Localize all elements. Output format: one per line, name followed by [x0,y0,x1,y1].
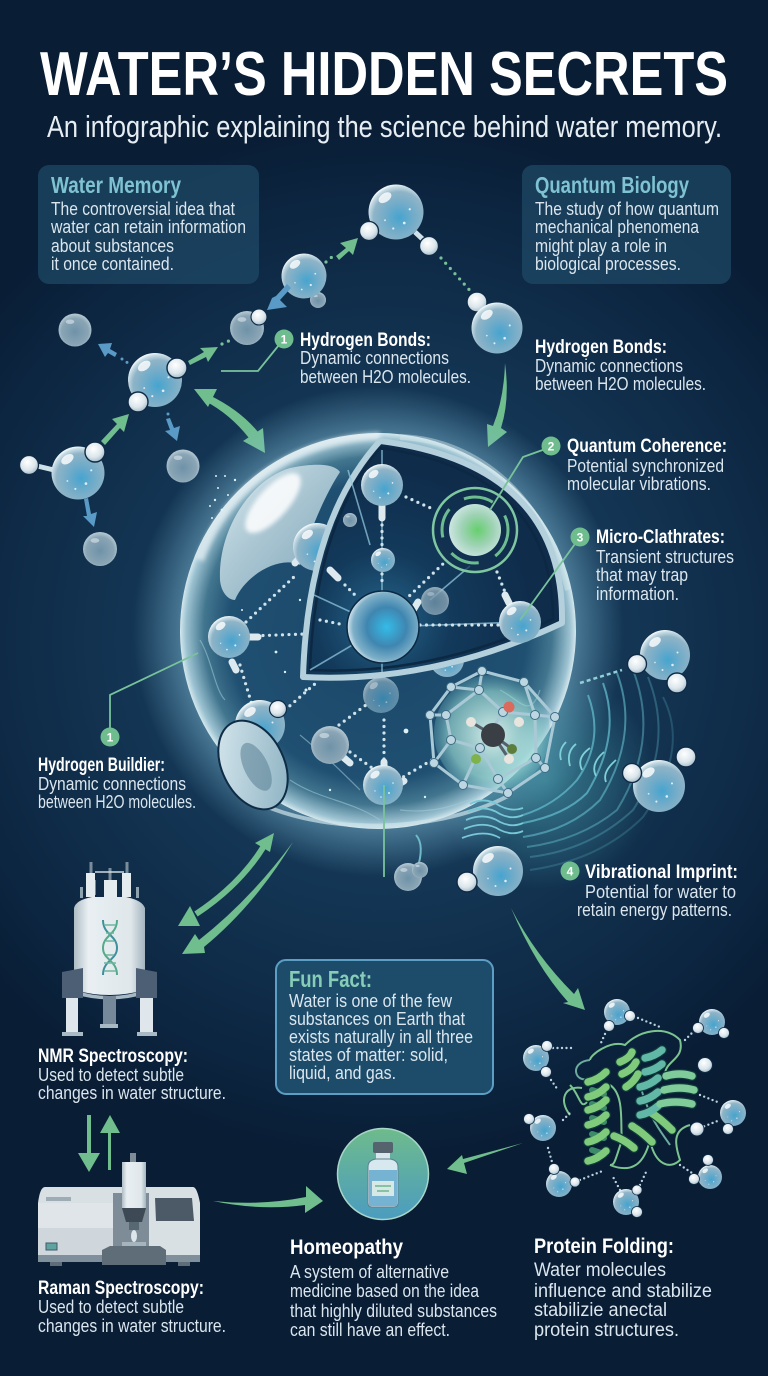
arrow: protein to homeopathy [447,1143,523,1174]
label: homeopathy: can still have an effect. [290,1320,450,1340]
label: hydrogen bonds right: Dynamic connections [535,356,683,376]
label: Raman spectroscopy: Raman Spectroscopy: [38,1278,204,1299]
panel: fun fact [276,960,493,1094]
arrows: NMR and Raman exchange [78,1115,120,1172]
label: micro-clathrates: 3 [577,530,584,544]
label: hydrogen bonds 1: between H2O molecules. [300,367,471,387]
label: homeopathy: A system of alternative [290,1262,449,1282]
label: homeopathy: that highly diluted substances [290,1301,497,1321]
text: quantum biology definition: might play a role in [535,236,667,256]
label: hydrogen buildier: Hydrogen Buildier: [38,755,165,776]
label: hydrogen bonds right: Hydrogen Bonds: [535,337,667,358]
text: water memory definition [50,199,246,274]
text: water memory definition: The controversial idea that [51,199,235,219]
label: Raman spectroscopy [38,1278,226,1336]
label: NMR spectroscopy [38,1046,226,1103]
cutaway window [303,441,562,678]
text: water memory definition: water can retain information [50,217,246,237]
sphere highlight [220,465,340,600]
text: fun fact body [289,991,473,1083]
icon: homeopathy vial [338,1128,428,1220]
label: NMR spectroscopy: NMR Spectroscopy: [38,1046,188,1067]
label: NMR spectroscopy: Used to detect subtle [38,1065,184,1085]
label: micro-clathrates [570,527,734,604]
text: water memory definition: it once contained. [51,254,174,274]
panel: water memory [38,165,259,284]
label: protein folding: Protein Folding: [534,1235,674,1258]
central molecule [347,591,419,663]
label: hydrogen bonds 1: Hydrogen Bonds: [300,330,431,351]
arrow: curved into sphere from right [487,363,507,447]
text: fun fact body: states of matter: solid, [289,1045,448,1065]
leader lines [110,340,580,877]
label: NMR spectroscopy: changes in water structure. [38,1083,226,1103]
text: fun fact body: exists naturally in all three [289,1027,473,1047]
water shell bonds [548,1018,720,1190]
label: homeopathy: Homeopathy [290,1236,403,1259]
label: vibrational imprint: 4 [567,864,574,878]
heading: water memory: Water Memory [51,172,181,198]
panel: quantum biology [522,165,731,284]
label: quantum coherence: 2 [548,440,555,454]
icon: protein with water shell [523,999,746,1218]
helix ribbons [588,1050,694,1161]
label: micro-clathrates: information. [596,584,679,604]
molecule network: upper chain [20,184,522,566]
icon: dna helix [103,920,117,975]
label: Raman spectroscopy: Used to detect subtle [38,1297,184,1317]
label: Raman spectroscopy: changes in water structure. [38,1316,226,1336]
sphere glow [133,386,623,876]
text: quantum biology definition: mechanical phenomena [535,217,700,237]
label: quantum coherence [542,436,727,494]
small arrows between molecules [83,238,358,527]
label: quantum coherence: Potential synchronized [567,456,724,476]
label: hydrogen bonds 1: 1 [281,332,288,346]
teal glow lower right [435,670,655,890]
label: micro-clathrates: Transient structures [596,547,734,567]
label: hydrogen buildier: between H2O molecules. [38,792,196,812]
icon: Raman spectrometer [38,1153,200,1266]
label: homeopathy: medicine based on the idea [290,1281,480,1301]
label: hydrogen bonds right: between H2O molecules. [535,374,706,394]
label: vibrational imprint: retain energy patterns. [577,900,732,920]
veins [200,640,540,820]
label: homeopathy [290,1236,497,1340]
label: quantum coherence: molecular vibrations. [567,474,711,494]
icon: NMR spectrometer [62,862,157,1034]
text: quantum biology definition: biological processes. [535,254,681,274]
arrow: sphere to NMR lower [182,842,293,954]
heading: fun fact: Fun Fact: [289,966,372,992]
label: protein folding [534,1235,712,1341]
double arrow: molecules to sphere [194,389,265,453]
label: micro-clathrates: Micro-Clathrates: [596,527,725,548]
heading: quantum biology: Quantum Biology [535,172,689,198]
blob droplet [205,709,301,821]
vibration waves [462,670,673,870]
arrow: sphere to protein [511,908,585,1010]
hydrogen bonds outside cutaway [208,523,464,805]
label: micro-clathrates: that may trap [596,565,688,585]
arrow: Raman to homeopathy [213,1186,323,1213]
label: protein folding: Water molecules [534,1260,666,1281]
clathrate cage [426,666,560,798]
label: protein folding: influence and stabilize [534,1281,712,1302]
text: fun fact body: substances on Earth that [289,1009,465,1029]
text: fun fact body: Water is one of the few [289,991,453,1011]
sparkle speckle [209,475,426,798]
molecules: right of sphere [394,630,696,896]
main water sphere cutaway [180,433,576,829]
label: hydrogen buildier: Dynamic connections [38,774,186,794]
highlighted green molecule [433,488,517,572]
label: hydrogen bonds 1: Dynamic connections [300,348,449,368]
label: hydrogen buildier [38,728,196,812]
label: vibrational imprint [560,862,738,920]
label: hydrogen bonds 1 [274,330,471,387]
text: quantum biology definition: The study of how quantum [535,199,719,219]
double arrow: sphere to NMR [178,833,274,926]
label: hydrogen buildier: 1 [107,730,114,744]
label: protein folding: protein structures. [534,1320,679,1341]
label: hydrogen bonds right [535,337,706,394]
label: quantum coherence: Quantum Coherence: [567,436,727,457]
text: water memory definition: about substances [51,236,174,256]
text: quantum biology definition [535,199,719,274]
label: protein folding: stabilizie anectal [534,1300,667,1321]
label: vibrational imprint: Potential for water to [585,882,736,902]
label: vibrational imprint: Vibrational Imprint: [585,862,738,883]
text: fun fact body: liquid, and gas. [289,1063,396,1083]
